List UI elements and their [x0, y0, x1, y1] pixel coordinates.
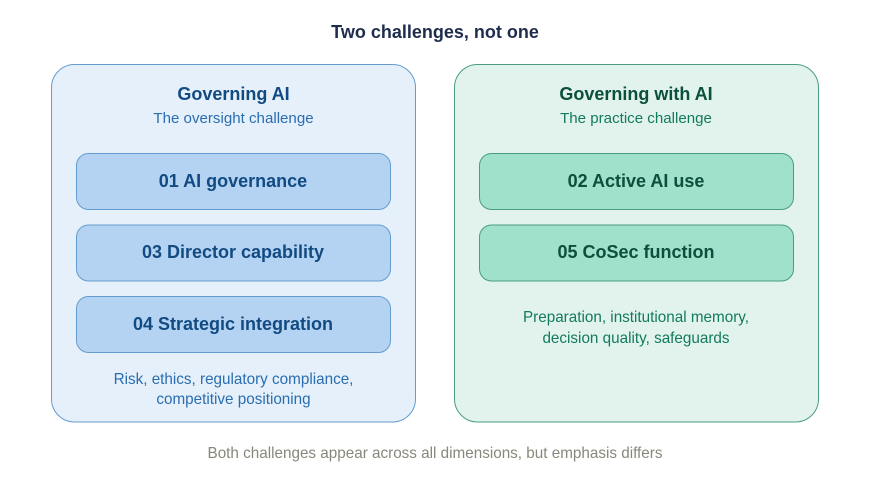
subheading: oversight challenge: The oversight challenge [153, 110, 314, 127]
footer note: Both challenges appear across all dimensions, but emphasis differs [208, 445, 663, 462]
subheading: practice challenge: The practice challenge [560, 110, 712, 127]
heading: Governing AI: Governing AI [177, 84, 290, 104]
card: 01 AI governance [76, 154, 390, 210]
panel: Governing with AI [454, 64, 818, 422]
card: 02 Active AI use [480, 154, 794, 210]
panel: Governing AI [52, 64, 416, 422]
heading: Governing with AI: Governing with AI [559, 84, 713, 104]
title: Two challenges, not one [331, 22, 539, 42]
note: practice focus line 2: decision quality, safeguards [542, 330, 730, 347]
note: oversight focus line 2: competitive positioning [156, 391, 311, 408]
card: 01 AI governance: 01 AI governance [159, 171, 307, 191]
card: 02 Active AI use: 02 Active AI use [568, 171, 704, 191]
card: 05 CoSec function: 05 CoSec function [557, 242, 715, 262]
card: 04 Strategic integration: 04 Strategic integration [133, 314, 333, 334]
note: oversight focus: Risk, ethics, regulatory compliance, [114, 371, 353, 388]
note: practice focus: Preparation, institutional memory, [523, 309, 749, 326]
card: 04 Strategic integration [76, 296, 390, 352]
card: 03 Director capability: 03 Director capability [142, 242, 324, 262]
card: 05 CoSec function [480, 225, 794, 281]
card: 03 Director capability [76, 225, 390, 281]
